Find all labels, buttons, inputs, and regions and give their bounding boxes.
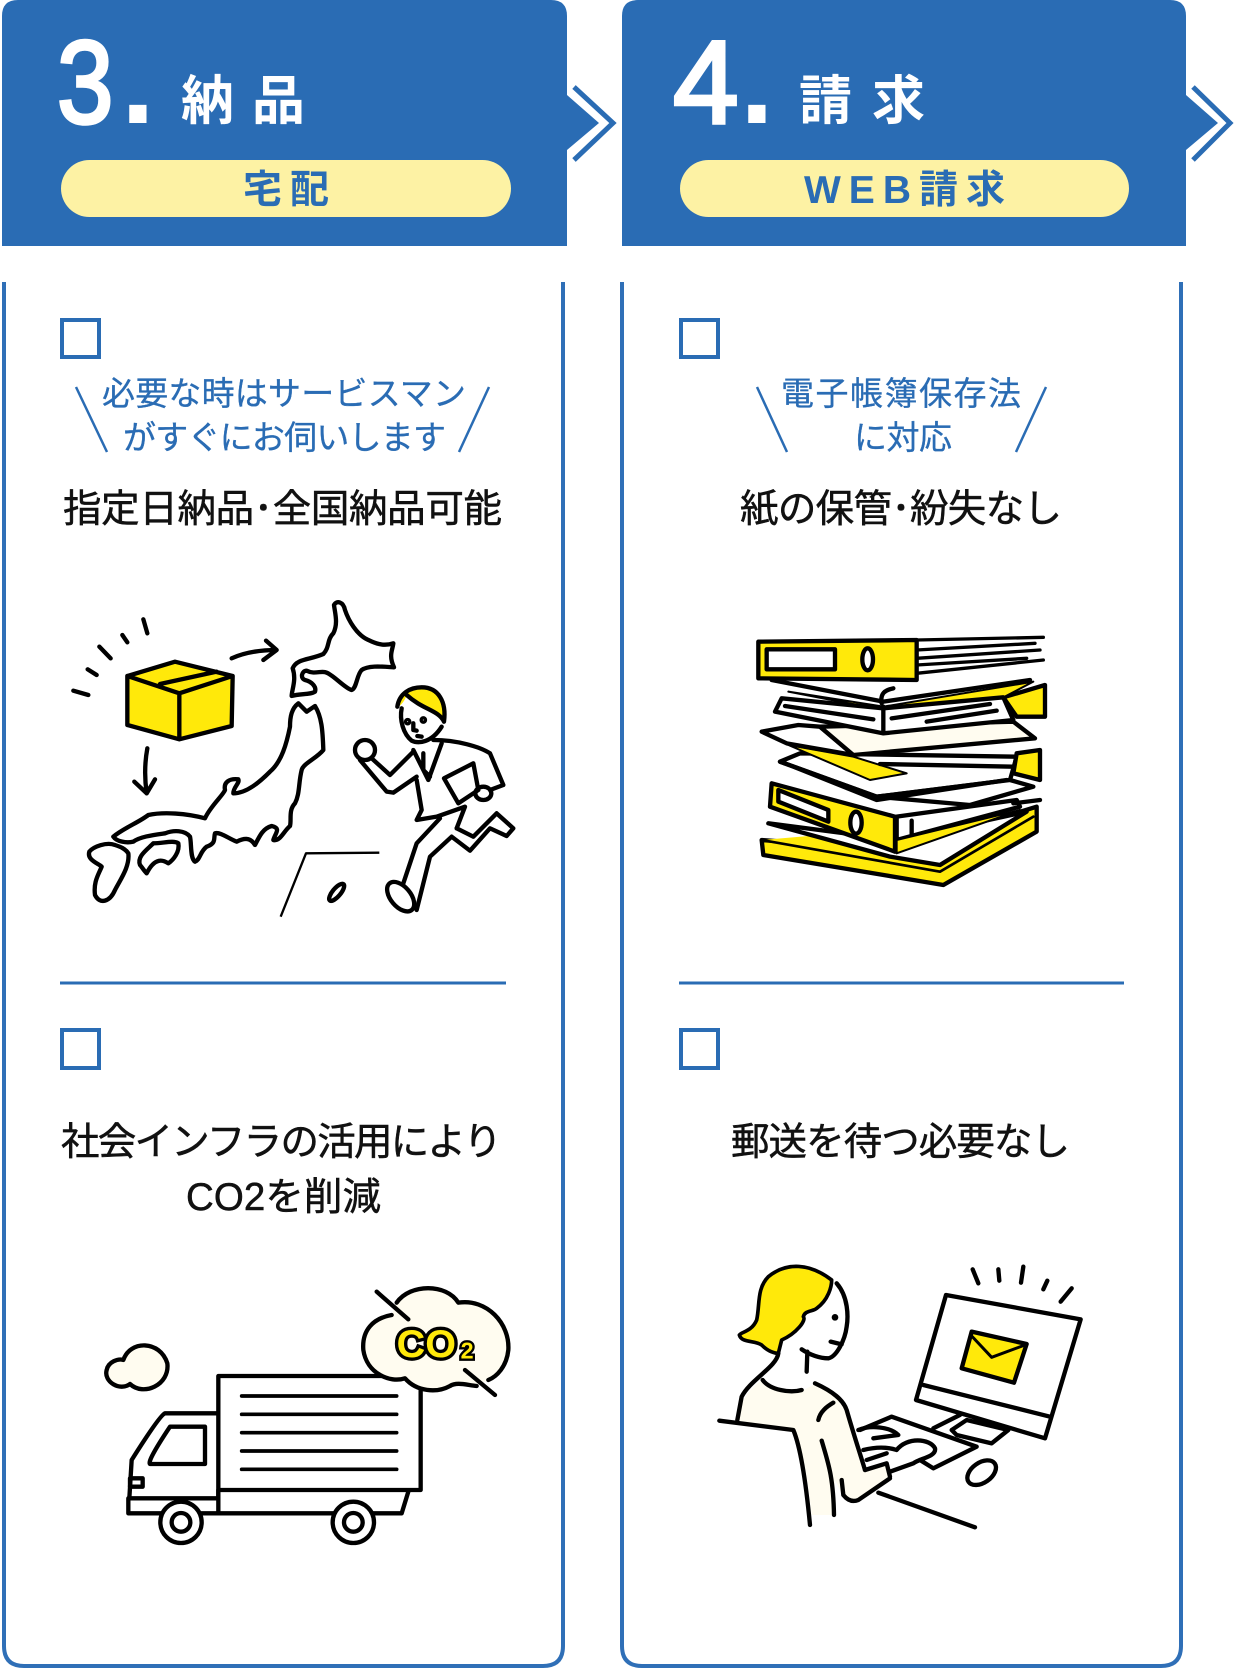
benefit text: 紙の保管･紛失なし: [740, 488, 1062, 531]
benefit text 2: 社会インフラの活用により: [61, 1121, 502, 1164]
checkbox 2: [681, 1030, 718, 1068]
arrow right: [232, 641, 277, 660]
callout: e-document law: [757, 375, 1046, 456]
checkbox 2: [62, 1030, 99, 1068]
pill: web billing: WEB請求: [804, 169, 1005, 212]
icon: monitor with mail: [916, 1267, 1081, 1443]
illustration: woman at computer: [719, 1266, 1081, 1527]
icon: parcel box: [73, 619, 233, 739]
column 3: delivery: [2, 0, 613, 1666]
header banner: 3: [2, 0, 599, 246]
pill: web billing: [680, 160, 1129, 217]
icon: CO2 cloud: 2: [461, 1338, 474, 1364]
panel outline: [622, 282, 1181, 1666]
callout: service staff: 必要な時はサービスマン: [102, 375, 466, 412]
number 4: 4: [673, 17, 739, 149]
illustration: stack of binders: [758, 637, 1045, 885]
heading: delivery: 納品: [181, 72, 305, 131]
benefit text: 指定日納品･全国納品可能: [63, 488, 502, 531]
icon: keyboard and mouse: [860, 1417, 1001, 1527]
icon: smoke puff: [106, 1345, 168, 1389]
arrow chevron: [574, 87, 613, 160]
middle papers: [762, 722, 1040, 805]
pill: takuhai: [61, 160, 511, 217]
callout: service staff: がすぐにお伺いします: [123, 419, 446, 456]
icon: CO2 cloud: CO: [397, 1323, 456, 1366]
period: .: [121, 13, 155, 149]
bottom yellow folders: [762, 807, 1037, 885]
illustration: truck and CO2 cloud: [106, 1288, 508, 1543]
arrow chevron: [1193, 87, 1230, 160]
benefit text 2: [61, 1121, 502, 1219]
number 3: 3: [57, 17, 113, 149]
period: .: [740, 13, 774, 149]
benefit text 2: 郵送を待つ必要なし: [731, 1121, 1070, 1164]
arrow down: [134, 748, 155, 793]
callout: e-document law: 電子帳簿保存法: [781, 375, 1021, 412]
checkbox: [62, 320, 99, 357]
top binder: [758, 637, 1043, 680]
column 4: billing: [622, 0, 1230, 1666]
callout: e-document law: に対応: [854, 419, 952, 456]
illustration: box, Japan map and running man: [73, 602, 513, 917]
bottom binder: [770, 783, 1040, 853]
heading: billing: 請求: [799, 72, 925, 131]
callout: service staff: [76, 375, 489, 456]
header banner: 4: [622, 0, 1218, 246]
pill: takuhai: 宅配: [243, 169, 329, 212]
icon: truck: [128, 1376, 421, 1543]
checkbox: [681, 320, 718, 357]
icon: CO2 cloud: [363, 1288, 508, 1395]
benefit text 2: CO2を削減: [186, 1176, 381, 1219]
second binder: [772, 680, 1045, 733]
panel outline: [4, 282, 563, 1666]
divider: [60, 982, 506, 984]
icon: woman: [719, 1266, 935, 1525]
divider: [679, 982, 1124, 984]
icon: running man: [355, 687, 513, 916]
icon: map of Japan: [89, 602, 394, 917]
